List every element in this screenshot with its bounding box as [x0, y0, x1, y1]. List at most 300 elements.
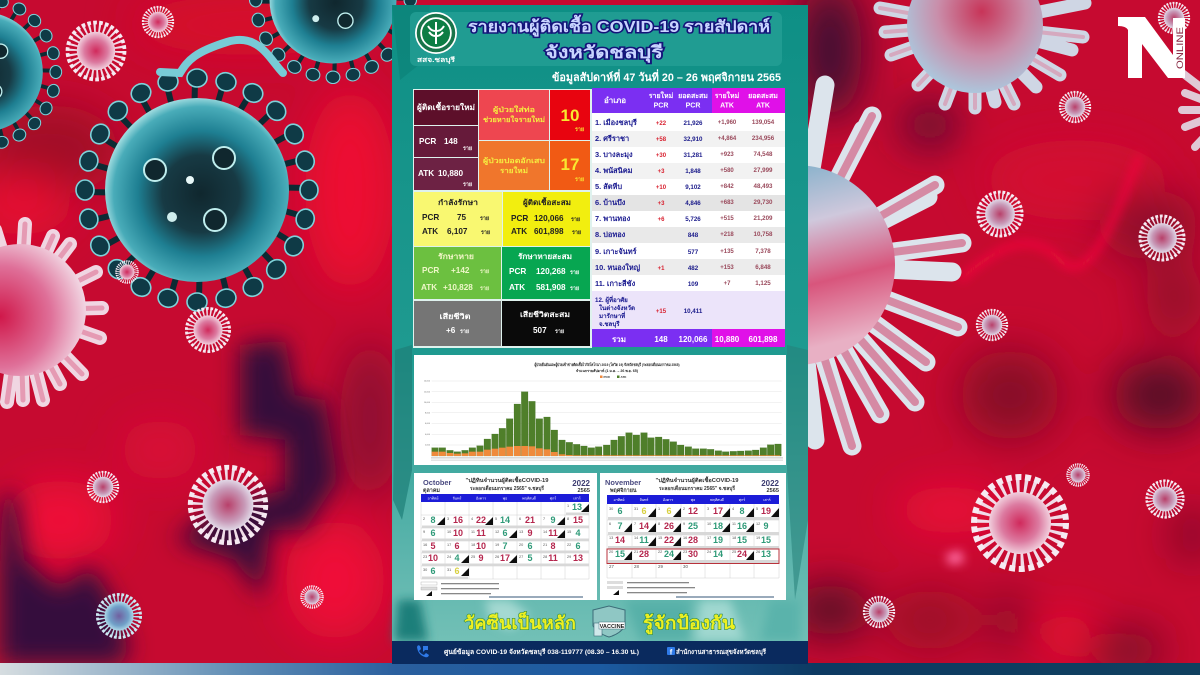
ventilator patients: ช่วยหายใจรายใหม่: [483, 115, 545, 124]
November grid: [607, 504, 779, 578]
table header: ATK: [720, 102, 734, 110]
October grid: 17: [500, 553, 510, 563]
under treatment: ATK: [422, 227, 438, 236]
pneumonia count: ราย: [575, 176, 584, 183]
November grid: 5: [756, 507, 758, 511]
November grid: 24: [737, 549, 747, 559]
ministry logo: [415, 12, 457, 64]
November grid: 6: [641, 506, 647, 516]
row: Sattahip: +10: [656, 185, 667, 191]
November grid: 25: [688, 521, 698, 531]
October grid: 30: [423, 568, 427, 572]
weekday header: อาทิตย์: [614, 498, 624, 502]
November grid: 17: [707, 536, 711, 540]
November heading: "ปฏิทินจำนวนผู้ติดเชื้อCOVID-19: [656, 475, 739, 485]
November grid: 28: [634, 564, 639, 569]
virus tail strand: [160, 40, 283, 73]
recovered: +10,828: [443, 283, 473, 292]
cumulative recovered: ราย: [570, 285, 579, 292]
row: Si Racha: 32,910: [684, 136, 703, 143]
row: Nong Yai: +153: [720, 265, 734, 271]
weekday header: [607, 495, 779, 504]
weekday header: พุธ: [503, 496, 507, 502]
row: Mueang Chonburi: +1,960: [718, 120, 737, 126]
chart plot: 6,000: [425, 423, 431, 425]
November grid: 12: [756, 522, 760, 526]
pneumonia count: 17: [561, 155, 579, 174]
October grid: 9: [423, 530, 425, 534]
virus: large silver top right: [880, 0, 1085, 108]
cumulative deaths: [502, 301, 590, 346]
panel lower hand shapes: [394, 600, 800, 641]
October grid: 29: [567, 555, 571, 559]
weekday header: พุธ: [691, 498, 695, 503]
October grid: 1: [567, 504, 569, 508]
under treatment: กำลังรักษา: [438, 198, 478, 207]
row: Sattahip: +842: [720, 184, 734, 190]
row: Phanat Nikhom: 4. พนัสนิคม: [595, 166, 633, 175]
November grid: 2: [683, 507, 685, 511]
table total row: 120,066: [679, 335, 708, 344]
cumulative cases: ATK: [511, 227, 527, 236]
table header: PCR: [686, 102, 700, 110]
row: Nong Yai: [595, 263, 771, 272]
October grid: 28: [543, 555, 547, 559]
under treatment: ราย: [481, 229, 490, 236]
recovered: ราย: [480, 268, 489, 275]
November grid: 21: [634, 550, 638, 554]
virus: large pink bottom left: [0, 224, 102, 402]
icon: facebook: [667, 647, 675, 656]
October grid: 21: [525, 515, 535, 525]
weekday header: จันทร์: [640, 498, 648, 502]
new PCR: [414, 126, 478, 157]
October grid: 13: [573, 553, 583, 563]
November grid: 22: [664, 535, 674, 545]
October grid: 6: [527, 541, 533, 551]
row: Ko Si Chang: 1,125: [755, 280, 771, 287]
October grid: 8: [567, 517, 569, 521]
row: Phanat Nikhom: +3: [658, 169, 665, 175]
October heading: "ปฏิทินจำนวนผู้ติดเชื้อCOVID-19: [466, 475, 549, 485]
icon: phone: [417, 645, 429, 657]
October grid: 7: [502, 541, 508, 551]
weekly cases chart: [414, 355, 786, 465]
new ATK: ราย: [463, 181, 472, 188]
November grid: 19: [761, 506, 771, 516]
icon: facebook: f: [670, 648, 673, 656]
row: Ban Bueng: 6. บ้านบึง: [595, 198, 626, 207]
cumulative recovered: รักษาหายสะสม: [518, 252, 572, 261]
cumulative deaths: เสียชีวิตสะสม: [520, 310, 570, 319]
row: Ban Bueng: [595, 198, 773, 207]
cumulative recovered: PCR: [509, 267, 526, 276]
November grid: 17: [713, 506, 723, 516]
weekday header: อาทิตย์: [428, 496, 438, 500]
chart legend: PCR: [604, 375, 611, 379]
recovered: +142: [451, 266, 470, 275]
new PCR: 148: [444, 137, 458, 146]
table header: ATK: [756, 102, 770, 110]
row: Si Racha: 234,956: [752, 135, 775, 142]
October grid: 11: [476, 528, 486, 538]
cumulative recovered: 120,268: [536, 267, 566, 276]
cumulative deaths: 507: [533, 326, 547, 335]
row: Bo Thong: +218: [720, 232, 734, 238]
October grid: 3: [447, 517, 449, 521]
row: Si Racha: +4,864: [718, 136, 737, 142]
row: Phan Thong: +6: [658, 217, 665, 223]
chart axis labels: [431, 457, 783, 461]
cumulative cases: ผู้ติดเชื้อสะสม: [523, 196, 571, 208]
October heading: October: [423, 478, 451, 487]
October grid: 31: [447, 568, 451, 572]
new PCR: ราย: [463, 145, 472, 152]
deaths: [414, 301, 501, 346]
ventilator count: [550, 90, 590, 140]
under treatment: [414, 192, 502, 246]
November grid: 3: [707, 507, 709, 511]
virus: large teal centre-left: [76, 69, 318, 311]
row: Phan Thong: [595, 214, 773, 223]
October grid: 11: [548, 528, 558, 538]
pneumonia patients: ผู้ป่วยปอดอักเสบ: [483, 156, 546, 166]
November grid: 14: [634, 536, 638, 540]
October grid: 18: [471, 543, 475, 547]
virus: teal top left corner: [0, 0, 62, 151]
October grid: 8: [430, 515, 436, 525]
logo: N Online: ONLINE: [1175, 27, 1186, 69]
row: Ko Si Chang: [595, 279, 771, 288]
cumulative deaths: ราย: [555, 328, 564, 335]
October grid: 6: [430, 566, 436, 576]
weekday header: อังคาร: [663, 498, 673, 502]
chart plot: 14,000: [424, 381, 431, 383]
November grid: 19: [713, 535, 723, 545]
chart legend: [600, 375, 627, 379]
October grid: 9: [550, 515, 556, 525]
PCR bars: [432, 446, 780, 456]
November grid: 28: [639, 549, 649, 559]
table total row: 601,898: [749, 335, 778, 344]
calendar: November: [600, 473, 786, 600]
October grid: 6: [430, 528, 436, 538]
row: Si Racha: +58: [656, 137, 667, 143]
icon: vaccine shield: VACCINE: [600, 624, 625, 630]
November grid: 19: [756, 536, 760, 540]
November grid: 12: [688, 506, 698, 516]
October grid: 4: [454, 553, 460, 563]
table header: ยอดสะสม: [678, 93, 708, 100]
November legend: [607, 581, 774, 598]
November grid: 30: [683, 564, 688, 569]
October grid: 8: [550, 541, 556, 551]
row: Bang Lamung: +923: [720, 152, 734, 158]
November grid: 31: [634, 507, 638, 511]
November grid: 25: [732, 550, 736, 554]
row: Ko Chan: +135: [720, 249, 734, 255]
November grid: 26: [664, 521, 674, 531]
November grid: 16: [737, 521, 747, 531]
new ATK: ATK: [418, 169, 434, 178]
October heading: [423, 475, 591, 494]
table header: รายใหม่: [715, 91, 740, 100]
cumulative recovered: 581,908: [536, 283, 566, 292]
November grid: 1: [658, 507, 660, 511]
October grid: 10: [476, 541, 486, 551]
logo: N Online: [1118, 17, 1186, 78]
October heading: ระลอกเดือนมกราคม 2565" จ.ชลบุรี: [470, 485, 544, 492]
weekday header: จันทร์: [453, 496, 461, 500]
small pink viruses, left area: [67, 7, 323, 638]
row: Bang Lamung: 31,281: [684, 152, 703, 159]
November grid: 22: [658, 550, 662, 554]
row: Bo Thong: 8. บ่อทอง: [595, 230, 626, 239]
row: Mueang Chonburi: [595, 118, 775, 127]
row: Bang Lamung: [595, 150, 773, 159]
October grid: 16: [453, 515, 463, 525]
October grid: [421, 502, 589, 579]
November heading: 2565: [767, 488, 779, 494]
facebook page text: สำนักงานสาธารณสุขจังหวัดชลบุรี: [676, 648, 766, 656]
cumulative cases: 601,898: [534, 227, 564, 236]
November grid: 9: [683, 522, 685, 526]
row: Si Racha: 2. ศรีราชา: [595, 134, 629, 143]
November grid: 6: [617, 506, 623, 516]
row: Mueang Chonburi: 1. เมืองชลบุรี: [595, 118, 637, 127]
chart plot: 2,000: [425, 445, 431, 447]
row: Phan Thong: 21,209: [754, 215, 773, 222]
row: Ko Chan: 7,378: [755, 248, 771, 255]
October grid: 13: [519, 530, 523, 534]
November grid: 10: [707, 522, 711, 526]
row: out of province: 12. ผู้ที่อาศัย: [595, 295, 628, 305]
November grid: 4: [732, 507, 734, 511]
header box: [410, 12, 782, 66]
October grid: 5: [430, 541, 436, 551]
weekday header: อังคาร: [476, 496, 486, 500]
row: out of province: มารักษาที่: [599, 311, 625, 320]
November grid: 16: [683, 536, 687, 540]
row: Ban Bueng: +683: [720, 200, 734, 206]
chart title: จำแนกรายสัปดาห์ (1 ม.ค. – 26 พ.ย. 65): [576, 368, 639, 373]
ministry logo: สสจ.ชลบุรี: [417, 56, 456, 64]
October grid: 2: [423, 517, 425, 521]
table header: [592, 88, 785, 113]
recovered: ATK: [421, 283, 437, 292]
row: out of province: [595, 295, 703, 328]
October grid: 23: [423, 555, 427, 559]
chart plot: 4,000: [425, 434, 431, 436]
row: Phanat Nikhom: 1,848: [685, 168, 701, 175]
October grid: 13: [572, 502, 582, 512]
November grid: 8: [739, 506, 745, 516]
under treatment: ราย: [480, 215, 489, 222]
October grid: 14: [500, 515, 510, 525]
recovered: ราย: [480, 285, 489, 292]
recovered: รักษาหาย: [438, 252, 474, 261]
new ATK: [414, 158, 478, 190]
calendar: October: [414, 473, 597, 600]
October heading: 2022: [572, 479, 591, 488]
row: Ban Bueng: +3: [658, 201, 665, 207]
October grid: 6: [519, 517, 521, 521]
November grid: 18: [732, 536, 736, 540]
weekday header: [421, 494, 589, 502]
November grid: 14: [713, 549, 723, 559]
weekday header: พฤหัสบดี: [522, 496, 537, 500]
October grid: 9: [478, 553, 484, 563]
October grid: 11: [548, 553, 558, 563]
chart title: ผู้ป่วยยืนยันและผู้ป่วยเข้าข่ายติดเชื้อไวรัสโคโรนา 2019 (โควิด 19) จังหวัดชลบุรี (ระลอกเดือนมกราคม 2565): [534, 360, 680, 368]
slogan right: รู้จักป้องกัน: [643, 613, 736, 635]
November grid: 30: [688, 549, 698, 559]
row: Mueang Chonburi: 21,926: [684, 120, 703, 127]
row: Phan Thong: +515: [720, 216, 734, 222]
November heading: พฤศจิกายน: [609, 487, 637, 494]
November grid: 9: [763, 521, 769, 531]
row: Sattahip: 5. สัตหีบ: [595, 182, 622, 191]
October grid: 25: [471, 555, 475, 559]
cumulative cases: ราย: [571, 216, 580, 223]
table total row: รวม: [612, 335, 626, 344]
October grid: 6: [502, 528, 508, 538]
row: Bo Thong: [595, 230, 773, 239]
October grid: 9: [527, 528, 533, 538]
table header: ยอดสะสม: [748, 93, 778, 100]
summary grid: [413, 89, 592, 348]
virus: teal top right of left area: [250, 0, 416, 83]
October grid: 21: [543, 543, 547, 547]
November grid: 24: [664, 549, 674, 559]
title: รายงานผู้ติดเชื้อ COVID-19 รายสัปดาห์: [468, 14, 770, 38]
November grid: 30: [609, 507, 613, 511]
virus: right edge: [1181, 72, 1200, 147]
poster panel: [392, 5, 808, 664]
deaths: +6: [446, 326, 456, 335]
October grid: 11: [471, 530, 475, 534]
weekday header: เสาร์: [573, 496, 581, 500]
slogan left: วัคซีนเป็นหลัก: [464, 611, 576, 633]
ventilator patients: ผู้ป่วยใส่ท่อ: [493, 105, 535, 115]
new cases heading: [414, 90, 478, 125]
November grid: 7: [634, 522, 636, 526]
pneumonia patients: [479, 141, 549, 190]
November grid: 13: [761, 549, 771, 559]
October grid: 5: [527, 553, 533, 563]
November grid: 11: [732, 522, 736, 526]
row: Phanat Nikhom: +580: [720, 168, 734, 174]
October grid: 12: [495, 530, 499, 534]
ventilator patients: [479, 90, 549, 140]
row: out of province: 10,411: [684, 308, 703, 315]
October grid: 10: [453, 528, 463, 538]
row: Ban Bueng: 29,730: [754, 199, 773, 206]
October grid: 4: [575, 528, 581, 538]
row: Sattahip: [595, 182, 773, 191]
weekday header: ศุกร์: [739, 498, 745, 503]
October grid: 26: [495, 555, 499, 559]
November heading: [605, 475, 780, 494]
deaths: เสียชีวิต: [440, 312, 471, 321]
October legend: [421, 582, 583, 598]
table total row: 148: [654, 335, 668, 344]
table total row: [592, 329, 785, 347]
cumulative cases: PCR: [511, 214, 528, 223]
November grid: 24: [707, 550, 711, 554]
hotline text: ศูนย์ข้อมูล COVID-19 จังหวัดชลบุรี 038-119777 (08.30 – 16.30 น.): [444, 647, 639, 657]
row: Phan Thong: 5,726: [685, 216, 701, 223]
bottom gradient strip: [0, 663, 1200, 675]
new PCR: PCR: [419, 137, 436, 146]
table header: อำเภอ: [604, 96, 626, 105]
ventilator count: ราย: [575, 126, 584, 133]
cumulative cases: 120,066: [534, 214, 564, 223]
October grid: 20: [519, 543, 523, 547]
November grid: 15: [658, 536, 662, 540]
row: Nong Yai: +1: [658, 266, 665, 272]
row: Ko Chan: 9. เกาะจันทร์: [595, 247, 637, 256]
November grid: 27: [609, 564, 614, 569]
row: Phan Thong: 7. พานทอง: [595, 214, 631, 223]
weekday header: ศุกร์: [550, 496, 556, 502]
date line: ข้อมูลสัปดาห์ที่ 47 วันที่ 20 – 26 พฤศจิกายน 2565: [552, 69, 781, 85]
row: Bo Thong: 10,758: [754, 231, 773, 238]
November grid: 23: [683, 550, 687, 554]
November grid: 11: [639, 535, 649, 545]
chart title: [534, 360, 680, 373]
chart plot: 8,000: [425, 412, 431, 414]
row: Ban Bueng: 4,846: [685, 200, 701, 207]
October grid: 6: [575, 541, 581, 551]
footer bar: [392, 641, 808, 664]
October heading: 2565: [578, 488, 590, 494]
ATK bars: [432, 392, 781, 456]
row: Sattahip: 48,493: [754, 183, 773, 190]
ventilator count: 10: [561, 106, 579, 125]
row: Si Racha: [595, 134, 775, 143]
October grid: 16: [423, 543, 427, 547]
October grid: 14: [543, 530, 547, 534]
November grid: 26: [756, 550, 760, 554]
October grid: 6: [454, 541, 460, 551]
October heading: ตุลาคม: [423, 487, 440, 494]
November grid: 29: [658, 564, 663, 569]
November grid: 6: [609, 522, 611, 526]
weekday header: พฤหัสบดี: [710, 497, 725, 502]
November grid: 15: [761, 535, 771, 545]
chart plot: 10,000: [424, 402, 431, 404]
subtitle province: จังหวัดชลบุรี: [545, 42, 664, 63]
November grid: 28: [688, 535, 698, 545]
chart plot: 12,000: [424, 391, 431, 393]
pneumonia patients: รายใหม่: [500, 166, 528, 175]
cumulative cases: ราย: [572, 229, 581, 236]
October grid: 6: [454, 566, 460, 576]
under treatment: 75: [457, 213, 467, 222]
row: Ko Si Chang: 109: [688, 281, 699, 288]
pneumonia count: [550, 141, 590, 190]
October grid: 24: [447, 555, 451, 559]
October grid: 17: [447, 543, 451, 547]
October grid: 22: [476, 515, 486, 525]
chart legend: ATK: [620, 375, 627, 379]
new ATK: 10,880: [438, 169, 463, 178]
row: Ko Chan: 577: [688, 249, 699, 256]
row: Bo Thong: 848: [688, 232, 699, 239]
row: Phanat Nikhom: [595, 166, 773, 175]
row: out of province: จ.ชลบุรี: [599, 320, 620, 328]
